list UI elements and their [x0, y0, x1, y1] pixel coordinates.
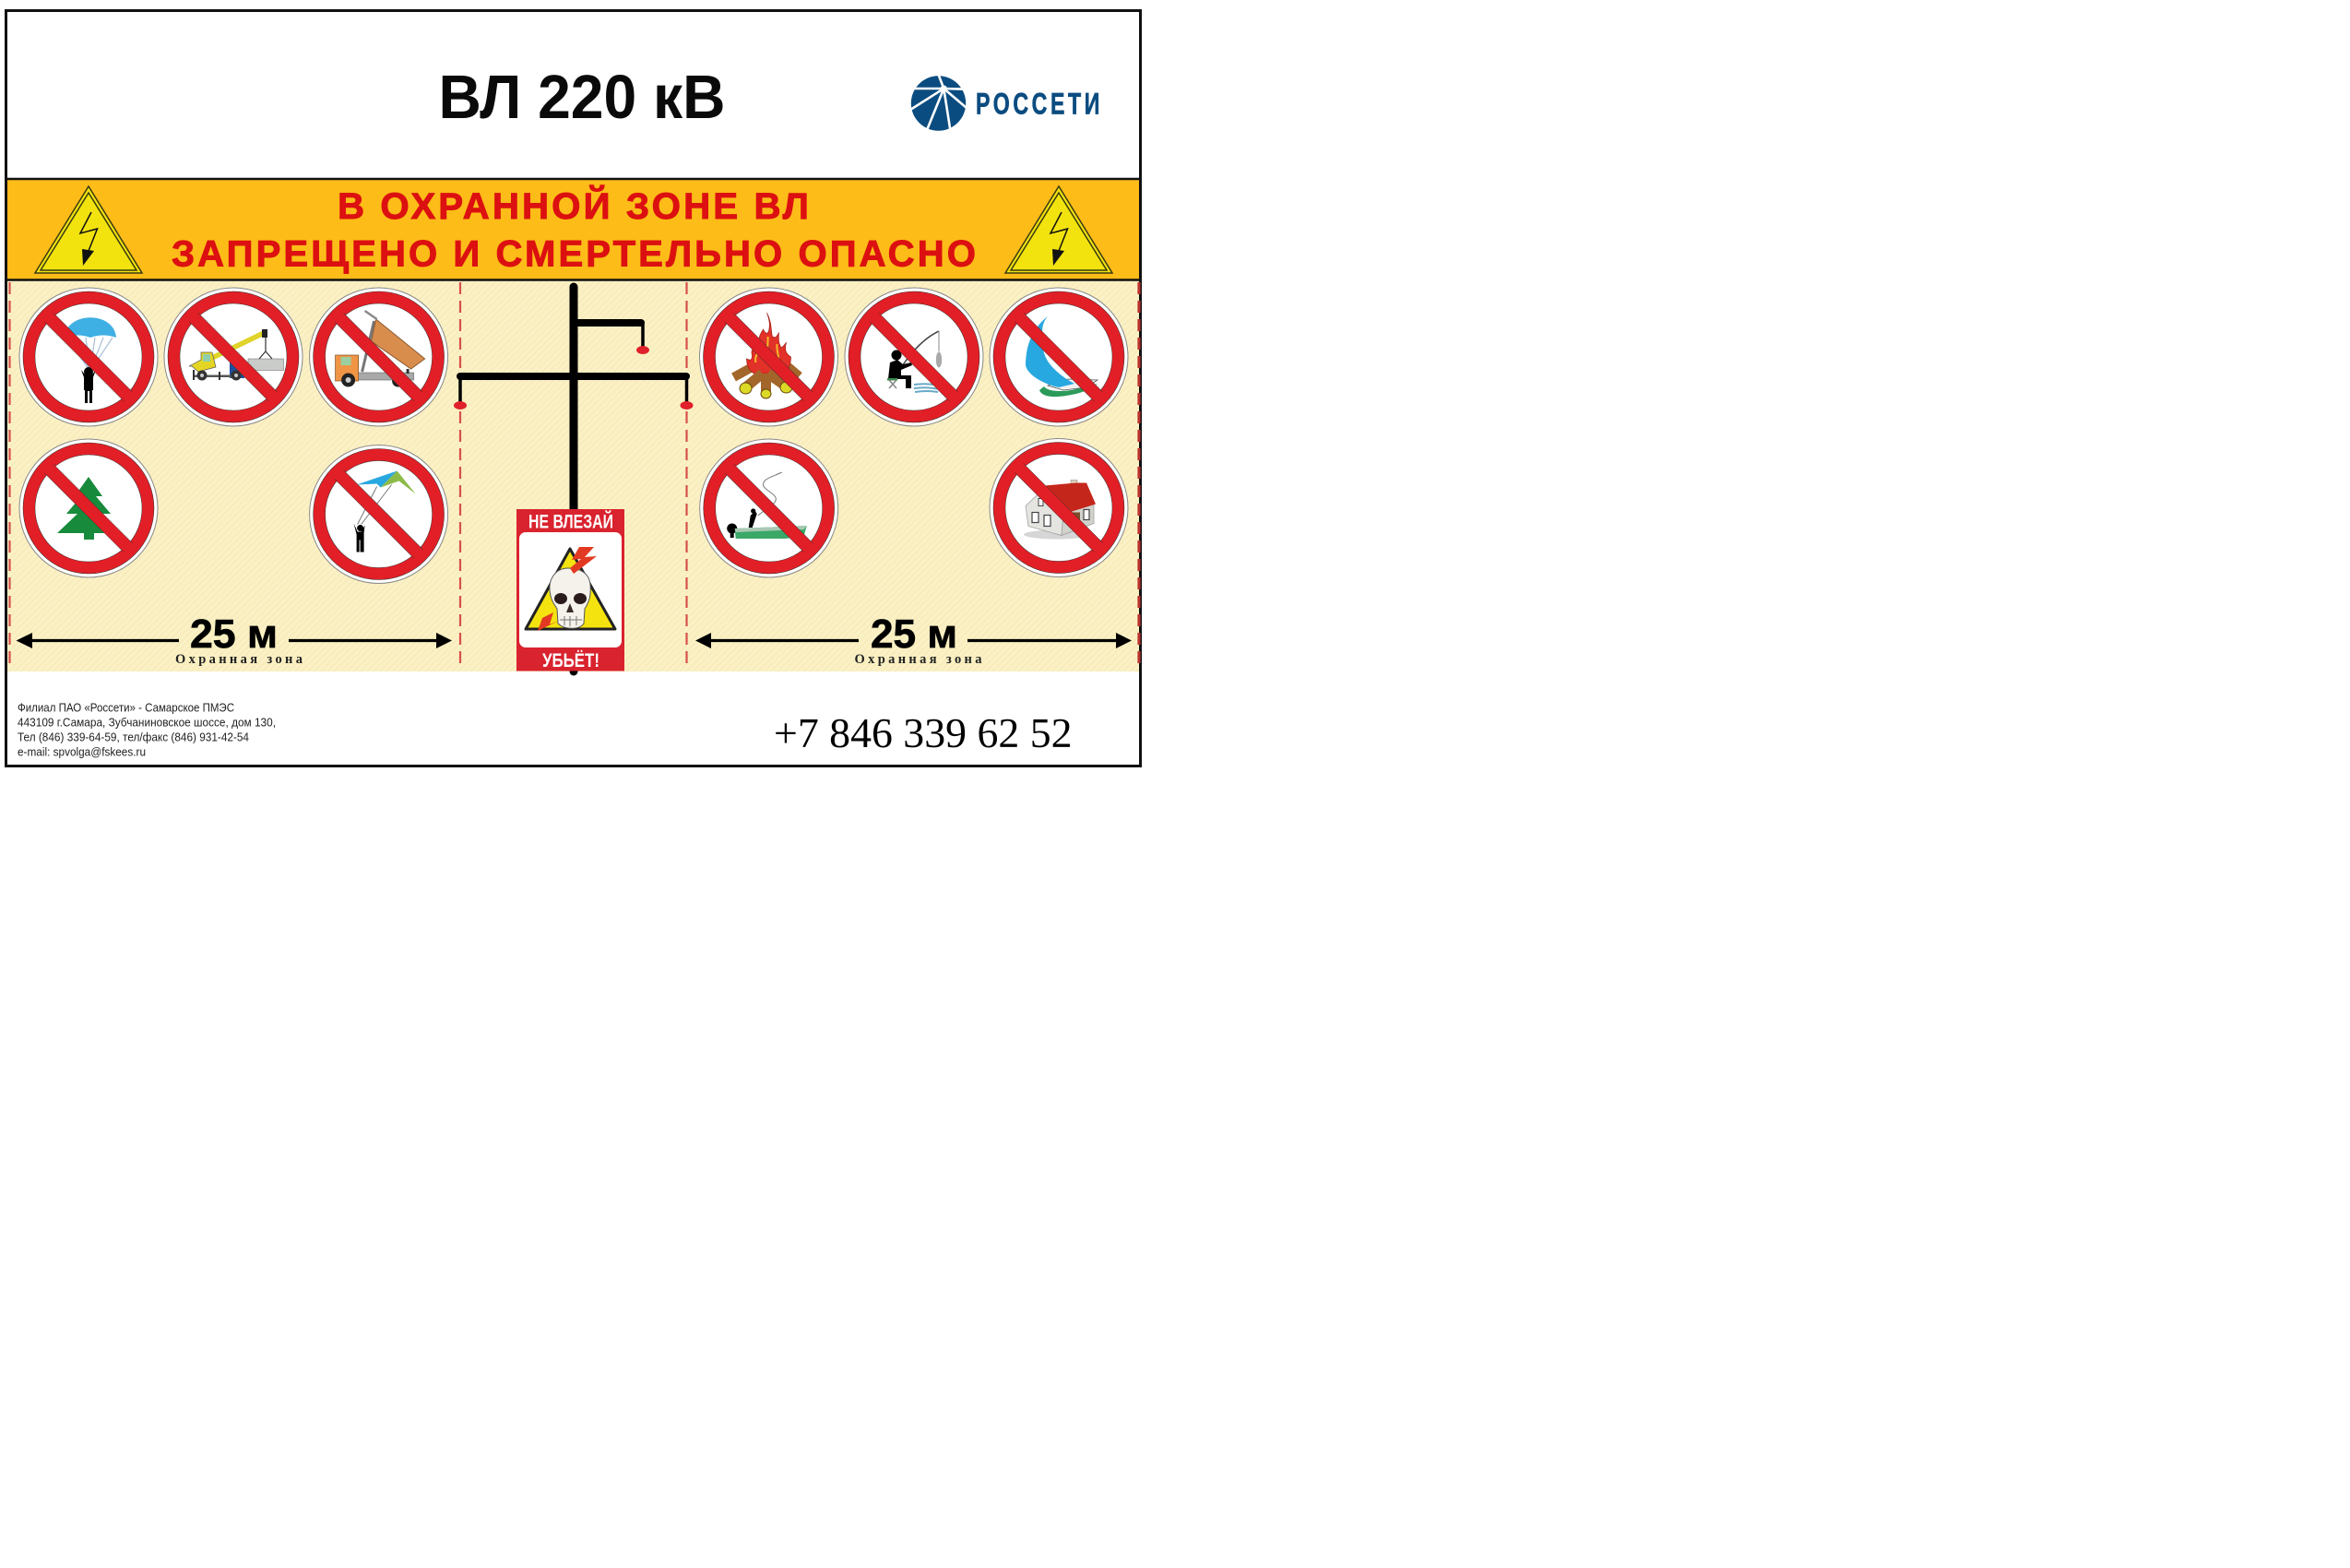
- power line tower: [454, 287, 694, 671]
- contact details: Филиал ПАО «Россети» - Самарское ПМЭС: [18, 701, 234, 714]
- sign triangle: [526, 549, 615, 629]
- skull: [550, 568, 590, 628]
- prohibition sign: dump truck: [310, 288, 448, 426]
- icon: right high voltage triangle: [1005, 186, 1112, 273]
- heading: banner line 2: ЗАПРЕЩЕНО И СМЕРТЕЛЬНО ОПАСНО: [172, 234, 979, 275]
- prohibition sign: crane: [164, 288, 303, 426]
- logo: Rosseti: [910, 74, 1103, 131]
- heading: banner line 1: В ОХРАННОЙ ЗОНЕ ВЛ: [338, 185, 812, 227]
- contact details: e-mail: spvolga@fskees.ru: [18, 745, 146, 758]
- sign frame background: [6, 11, 1140, 766]
- frame border and dividers: [6, 11, 1140, 766]
- dimension: left 25 m: [17, 612, 452, 667]
- icon: left high voltage triangle: [35, 186, 142, 273]
- zone caption: Охранная зона: [854, 652, 982, 667]
- prohibition sign: tree: [19, 439, 158, 577]
- contact details: 443109 г.Самара, Зубчаниновское шоссе, дом 130,: [18, 716, 276, 729]
- contact details: Тел (846) 339-64-59, тел/факс (846) 931-42-54: [18, 731, 249, 743]
- warning sign: do not climb: [516, 509, 624, 671]
- phone number: +7 846 339 62 52: [774, 710, 1072, 756]
- dimension label: 25 м: [190, 612, 278, 657]
- prohibition sign: sailboat: [990, 288, 1128, 426]
- prohibition sign: hang glider: [310, 445, 448, 583]
- prohibition sign: boat fishing: [700, 439, 838, 577]
- title: ВЛ 220 кВ: [439, 63, 725, 132]
- lightning bolts: [570, 547, 597, 574]
- prohibition sign: campfire: [699, 288, 837, 426]
- sign bottom text: УБЬЁТ!: [542, 650, 599, 671]
- sign top text: НЕ ВЛЕЗАЙ: [528, 511, 613, 533]
- panel: protection zone background: [7, 280, 1139, 671]
- contact details: [18, 701, 276, 758]
- dimension: right 25 m: [695, 612, 1132, 667]
- zone boundaries: dashed lines: [9, 282, 1139, 664]
- prohibition sign: parachute: [19, 288, 158, 426]
- prohibition sign: fishing: [845, 288, 983, 426]
- dimension label: 25 м: [871, 612, 957, 657]
- zone caption: Охранная зона: [175, 652, 303, 667]
- logo wordmark: РОССЕТИ: [976, 87, 1103, 120]
- panel: warning banner: [7, 179, 1139, 280]
- prohibition sign: house: [990, 439, 1128, 577]
